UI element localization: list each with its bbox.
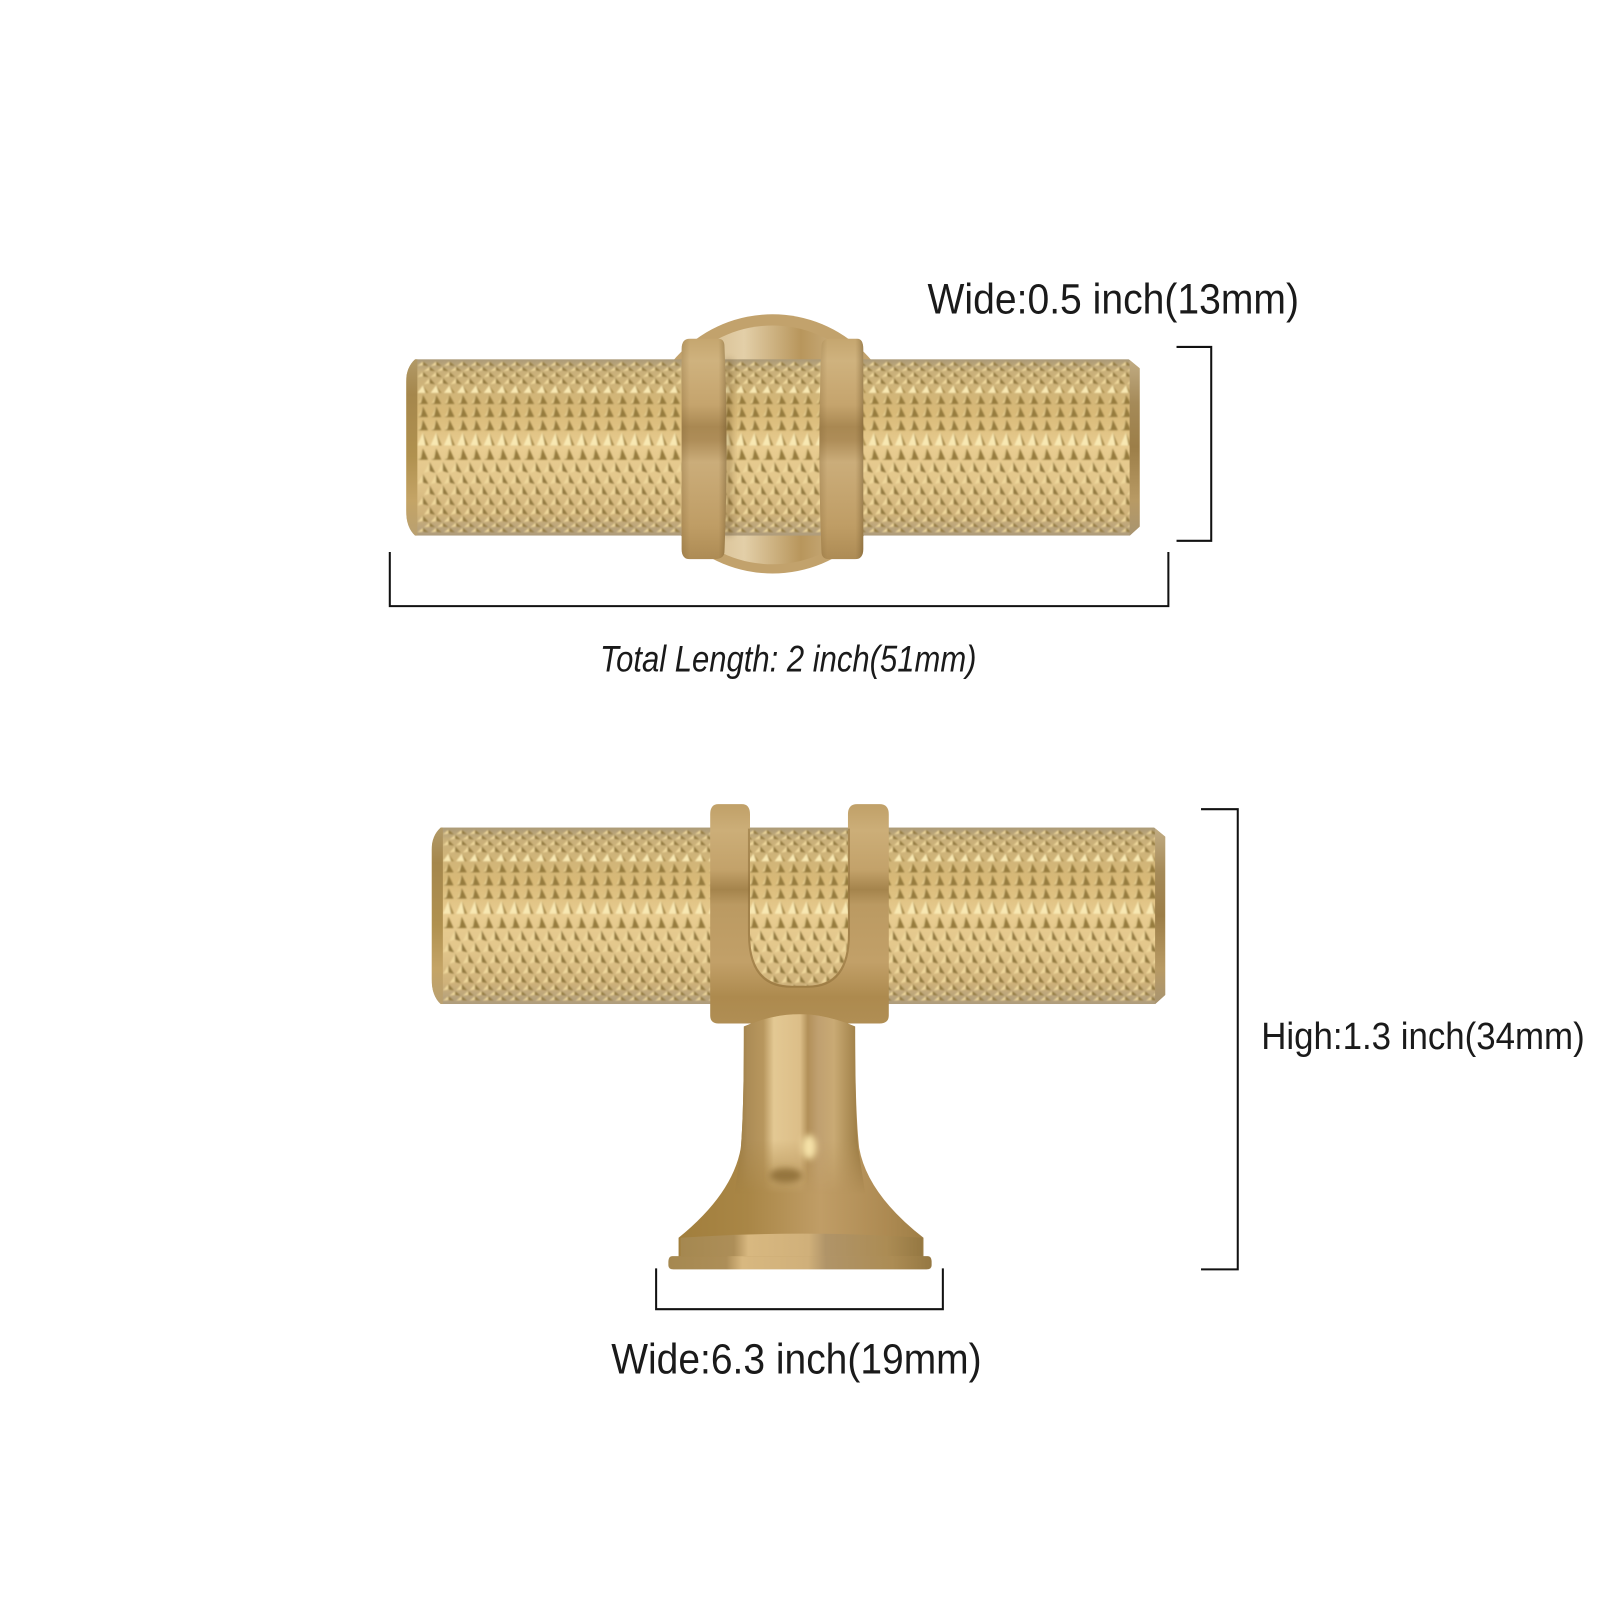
- dimension bracket: top view width: [1177, 347, 1211, 541]
- stem shaft highlights: [735, 1014, 865, 1194]
- knurled barrel, top view: [406, 359, 1141, 536]
- stem glint: [802, 1135, 816, 1159]
- foot flange: [668, 1256, 932, 1269]
- dimension bracket: height: [1201, 809, 1238, 1269]
- knurled barrel, side view: [432, 828, 1166, 1004]
- panel: side view of knob: [432, 804, 1166, 1269]
- dimension label: total length: Total Length: 2 inch(51mm): [600, 638, 977, 679]
- panel: top view of knob: [406, 314, 1141, 573]
- left retaining band: [682, 339, 727, 559]
- stem shadow: [769, 1168, 802, 1183]
- dimension label: base width: Wide:6.3 inch(19mm): [611, 1335, 982, 1383]
- barrel shadow beside bands: [724, 359, 733, 536]
- dimension label: top view width: Wide:0.5 inch(13mm): [928, 275, 1299, 323]
- fork inner rim: [749, 829, 849, 987]
- dimension bracket: total length: [390, 552, 1168, 606]
- right retaining band: [819, 339, 863, 559]
- dimension bracket: base width: [656, 1268, 943, 1309]
- foot ring: [681, 1234, 922, 1256]
- U-shaped fork: [710, 804, 889, 1023]
- stem with flared foot: [679, 1014, 923, 1257]
- round backplate disc: [643, 314, 902, 573]
